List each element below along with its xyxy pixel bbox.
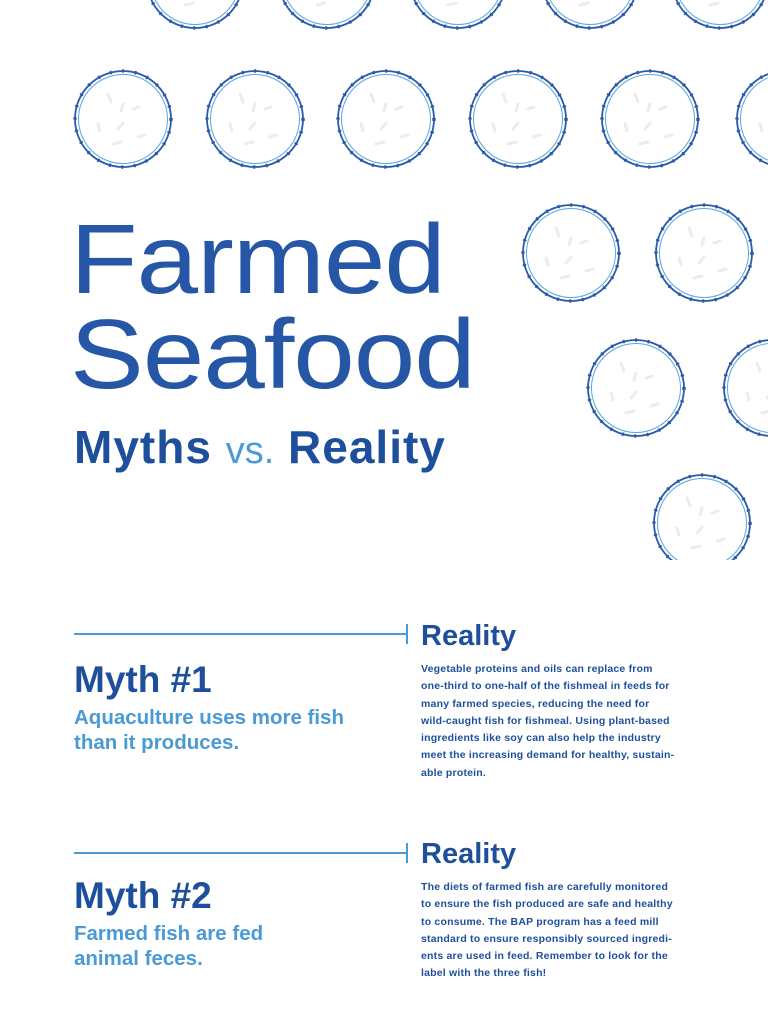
reality 1: Reality bbox=[421, 620, 516, 652]
divider myth 1 bbox=[74, 633, 406, 635]
background circles bbox=[73, 0, 768, 560]
reality 2: standard to ensure responsibly sourced ingredi- bbox=[421, 933, 672, 945]
reality 2: The diets of farmed fish are carefully monitored bbox=[421, 881, 668, 893]
myth 2: animal feces. bbox=[74, 947, 203, 970]
myth 2: Myth #2 bbox=[74, 875, 212, 916]
reality 1: Vegetable proteins and oils can replace from bbox=[421, 663, 653, 675]
title: Farmed bbox=[70, 204, 445, 314]
myth 1 bbox=[74, 659, 344, 754]
reality 1: one-third to one-half of the fishmeal in feeds for bbox=[421, 680, 670, 692]
reality 2: ents are used in feed. Remember to look for the bbox=[421, 950, 668, 962]
myth 1: than it produces. bbox=[74, 731, 239, 754]
reality 2: label with the three fish! bbox=[421, 967, 546, 979]
reality 2: Reality bbox=[421, 838, 516, 870]
reality 2: to ensure the fish produced are safe and healthy bbox=[421, 898, 673, 910]
title: Seafood bbox=[70, 299, 475, 409]
myth 2: Farmed fish are fed bbox=[74, 922, 263, 945]
reality 2: to consume. The BAP program has a feed mill bbox=[421, 916, 659, 928]
reality 1: wild-caught fish for fishmeal. Using plant-based bbox=[421, 715, 670, 727]
reality 1: meet the increasing demand for healthy, sustain- bbox=[421, 749, 674, 761]
reality 1 bbox=[421, 620, 674, 779]
reality 2 bbox=[421, 838, 673, 979]
myth 1: Aquaculture uses more fish bbox=[74, 706, 344, 729]
subtitle: Myths vs. Reality bbox=[74, 421, 446, 473]
reality 1: ingredients like soy can also help the industry bbox=[421, 732, 661, 744]
myth 2 bbox=[74, 875, 263, 970]
myth 1: Myth #1 bbox=[74, 659, 212, 700]
divider myth 2 bbox=[74, 852, 406, 854]
reality 1: many farmed species, reducing the need for bbox=[421, 698, 649, 710]
reality 1: able protein. bbox=[421, 767, 486, 779]
title bbox=[70, 204, 475, 409]
